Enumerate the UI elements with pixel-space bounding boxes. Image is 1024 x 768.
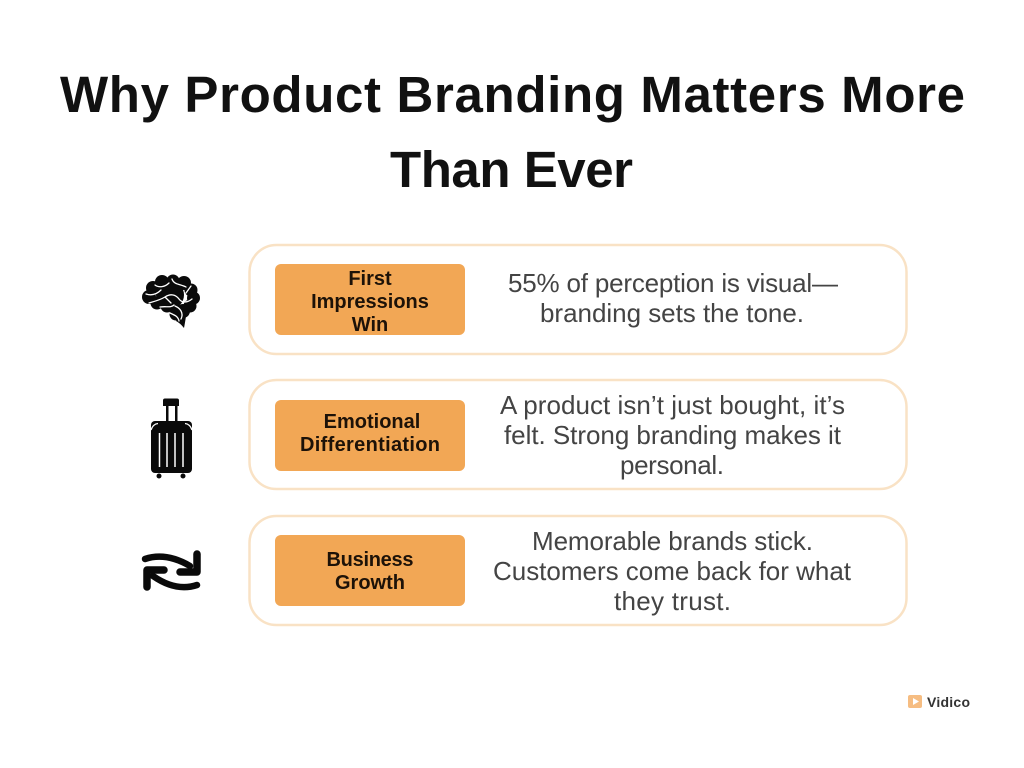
label: business growth: Growth: [335, 572, 405, 594]
icon: brain: [142, 274, 200, 328]
text: business growth description: [493, 526, 852, 616]
text: emotional differentiation description: felt. Strong branding makes it: [504, 420, 842, 450]
label: business growth: [275, 535, 465, 606]
label: emotional differentiation: Emotional: [324, 411, 420, 433]
panel: business growth: [250, 516, 906, 625]
text: emotional differentiation description: personal.: [620, 450, 724, 480]
title: Than Ever: [390, 141, 633, 198]
text: business growth description: Memorable brands stick.: [532, 526, 813, 556]
text: emotional differentiation description: A product isn’t just bought, it’s: [500, 390, 845, 420]
icon: suitcase: [151, 398, 192, 478]
panel: first impressions: [250, 245, 906, 354]
title: Why Product Branding Matters More: [60, 66, 965, 123]
label: first impressions win: Win: [352, 314, 388, 336]
title: [60, 66, 965, 198]
label: emotional differentiation: Differentiation: [300, 434, 440, 456]
text: business growth description: they trust.: [614, 586, 731, 616]
text: business growth description: Customers come back for what: [493, 556, 852, 586]
icon: repeat arrows: [145, 554, 197, 587]
label: first impressions win: [275, 264, 465, 336]
text: emotional differentiation description: [500, 390, 845, 480]
text: first impressions description: branding sets the tone.: [540, 298, 804, 328]
label: first impressions win: Impressions: [311, 291, 429, 313]
label: business growth: Business: [326, 549, 414, 571]
panel: emotional differentiation: [250, 380, 906, 489]
logo: Vidico: [908, 694, 970, 710]
text: first impressions description: 55% of perception is visual—: [508, 268, 838, 298]
label: emotional differentiation: [275, 400, 465, 471]
logo: Vidico: Vidico: [927, 694, 970, 710]
text: first impressions description: [508, 268, 838, 328]
label: first impressions win: First: [348, 268, 392, 290]
